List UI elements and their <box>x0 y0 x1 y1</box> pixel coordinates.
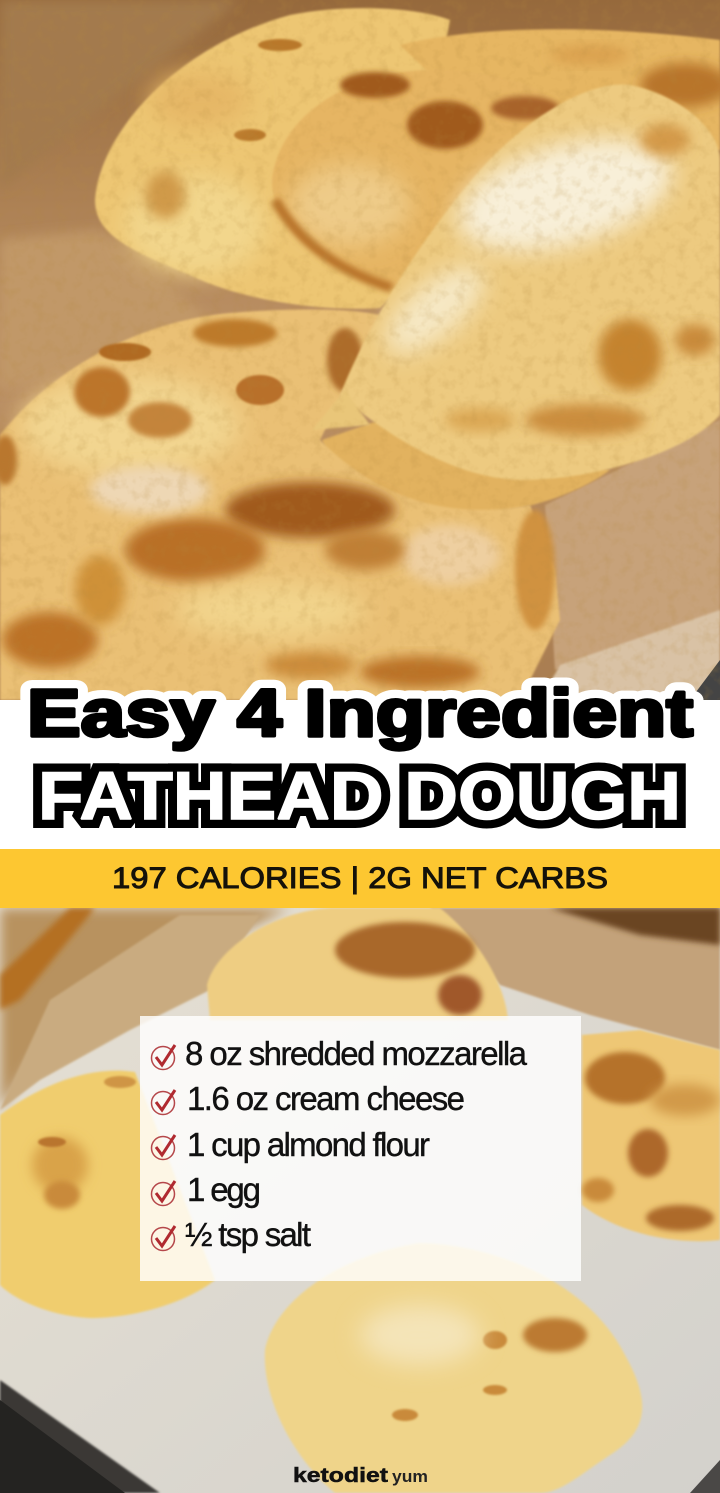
flatbread top left <box>95 8 450 309</box>
logo: ketodiet yum: yum <box>392 1467 428 1486</box>
bottom large flatbread <box>0 309 560 700</box>
flatbread top right back <box>400 29 720 160</box>
flatbread left <box>0 1071 215 1318</box>
flatbread centre <box>272 70 565 290</box>
yellow nutrition band <box>0 849 720 908</box>
ingredient panel <box>140 1016 581 1281</box>
folded flatbread front right <box>312 85 720 480</box>
ingredient 3: 1 cup almond flour <box>187 1126 430 1163</box>
flatbread under fold <box>322 420 610 516</box>
bottom photo: flatbreads on baking tray <box>0 908 720 1493</box>
ingredient 5: ½ tsp salt <box>185 1216 311 1253</box>
top photo: flatbreads on kraft paper <box>0 0 720 700</box>
tray edge <box>0 1380 160 1493</box>
ingredient 2: 1.6 oz cream cheese <box>187 1080 465 1117</box>
title line: FATHEAD DOUGH: FATHEAD DOUGH <box>38 758 681 834</box>
ingredient 4: 1 egg <box>187 1171 261 1208</box>
logo: ketodiet yum <box>293 1465 428 1487</box>
title line: Easy 4 Ingredient: Easy 4 Ingredient <box>27 676 693 751</box>
title line outline thickener: Easy 4 Ingredient <box>27 676 693 751</box>
ingredient 4 <box>152 1171 261 1208</box>
ingredient 1: 8 oz shredded mozzarella <box>185 1035 528 1072</box>
logo: ketodiet yum: ketodiet <box>293 1465 388 1487</box>
photo texture <box>0 0 720 700</box>
white title band <box>0 700 720 849</box>
nutrition text: 197 CALORIES | 2G NET CARBS <box>112 862 608 895</box>
title line white fill thickener: FATHEAD DOUGH <box>38 758 681 834</box>
flatbread right <box>582 1030 720 1241</box>
flatbread bottom <box>265 1243 642 1493</box>
paper right bottom <box>545 420 720 670</box>
flatbread top <box>207 908 508 1020</box>
